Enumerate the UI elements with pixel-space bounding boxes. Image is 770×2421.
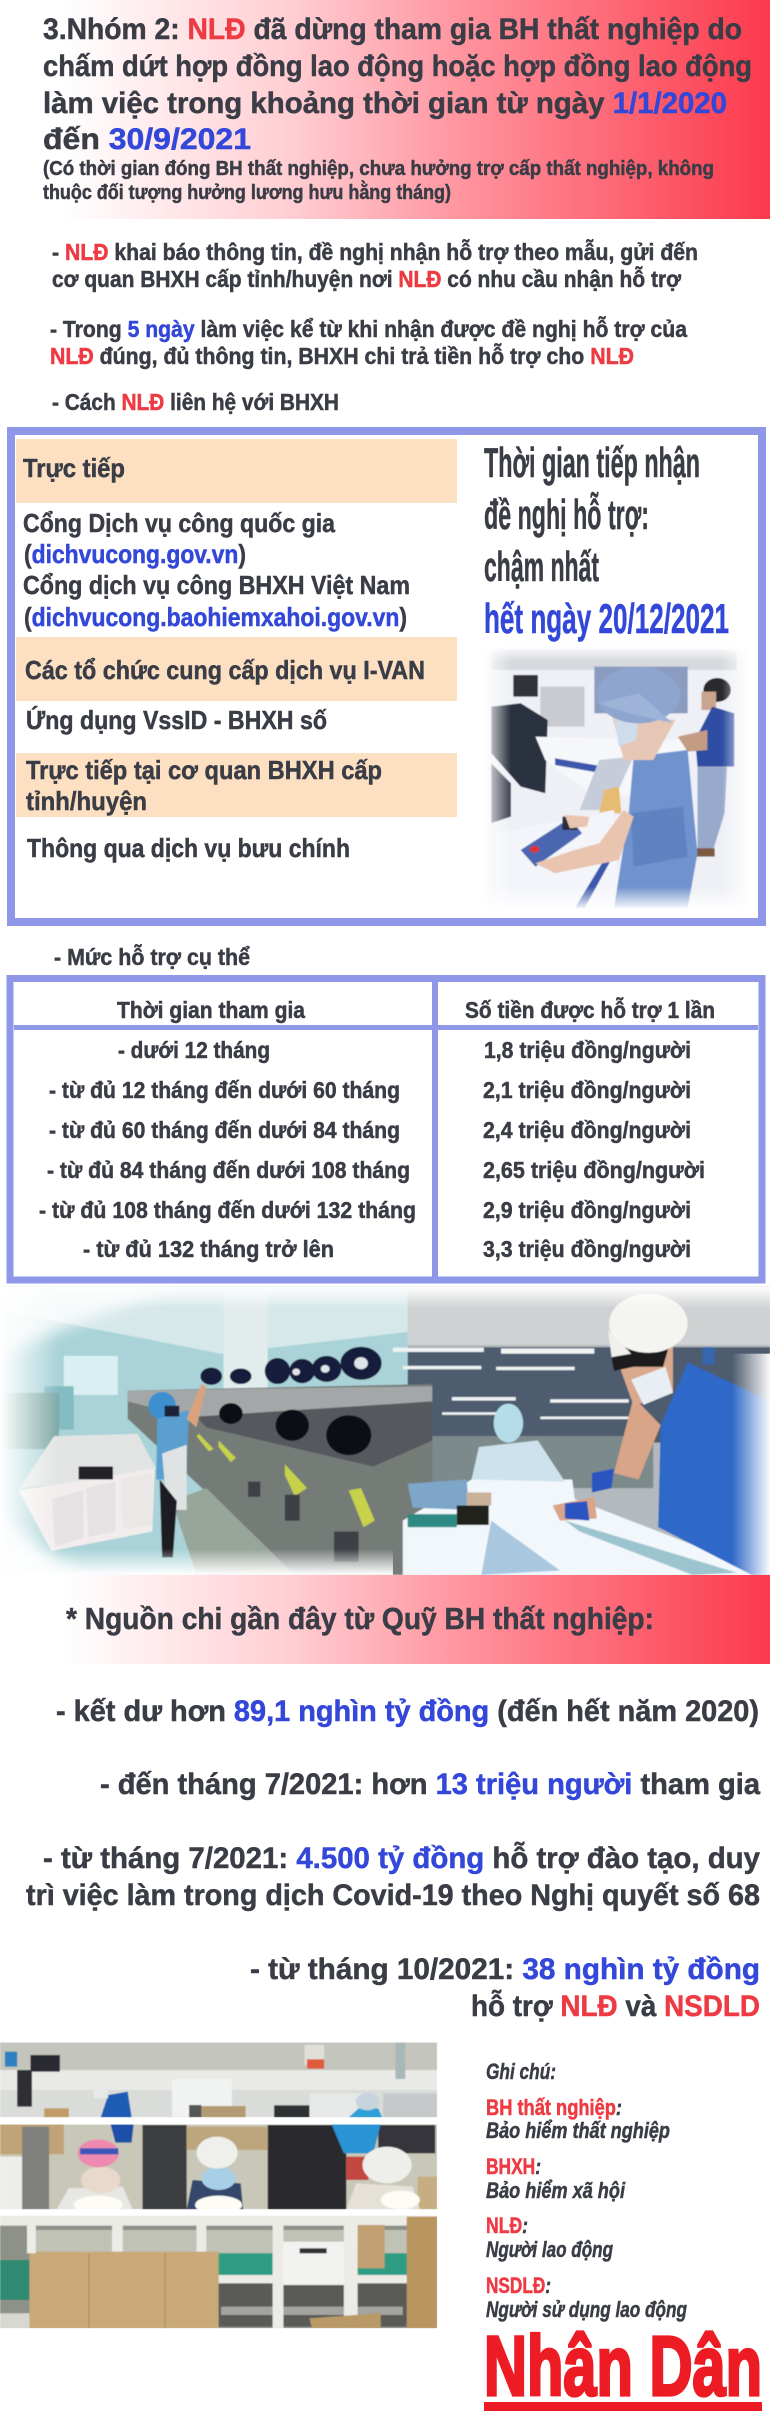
strip: packing station: [0, 2216, 437, 2328]
contact channel list: Các tổ chức cung cấp dịch vụ I-VAN: [25, 655, 425, 685]
panel: contact channels: [11, 431, 762, 922]
cart: [20, 1434, 156, 1488]
note: NLĐ: NLĐ:: [486, 2213, 528, 2238]
column: participation period: - từ đủ 108 tháng đến dưới 132 tháng: [39, 1197, 416, 1223]
column: amount per person: 3,3 triệu đồng/người: [483, 1236, 691, 1262]
panel: header banner: [0, 0, 770, 219]
peach row backgrounds: [16, 439, 457, 817]
contact channel list: Thông qua dịch vụ bưu chính: [27, 833, 350, 863]
man on the right: [703, 678, 731, 702]
centre worker: [187, 2180, 243, 2209]
photo: textile and garment factory: [0, 1286, 770, 1575]
spending list: [26, 1695, 760, 2023]
column: participation period: [39, 1037, 416, 1262]
cutting table: [403, 1479, 770, 1575]
column: amount per person: 1,8 triệu đồng/người: [484, 1037, 691, 1063]
table header: Thời gian tham gia: [117, 997, 305, 1023]
column: amount per person: 2,1 triệu đồng/người: [483, 1077, 691, 1103]
column: participation period: - từ đủ 60 tháng đến dưới 84 tháng: [49, 1117, 400, 1143]
section heading band: [0, 1575, 770, 1664]
panel: recent fund spending: [0, 1575, 770, 2023]
spending list: - kết dư hơn 89,1 nghìn tỷ đồng (đến hết năm 2020): [56, 1695, 759, 1728]
textile worker: [148, 1392, 176, 1420]
panel frame: [11, 431, 762, 922]
note: BHXH: BHXH:: [486, 2154, 541, 2179]
note heading: Ghi chú:: [486, 2059, 556, 2084]
spending list: trì việc làm trong dịch Covid-19 theo Nghị quyết số 68: [26, 1879, 760, 1912]
column: participation period: - dưới 12 tháng: [118, 1037, 270, 1063]
spending list: hỗ trợ NLĐ và NSDLD: [471, 1989, 760, 2023]
column: participation period: - từ đủ 12 tháng đến dưới 60 tháng: [49, 1077, 400, 1103]
main garment worker: [658, 1362, 770, 1575]
text block: procedure steps: NLĐ đúng, đủ thông tin, BHXH chi trả tiền hỗ trợ cho NLĐ: [50, 342, 634, 369]
text block: procedure steps: [50, 238, 698, 415]
panel: glossary notes: [486, 2059, 687, 2322]
header gradient background: [0, 0, 770, 219]
spending list: - từ tháng 10/2021: 38 nghìn tỷ đồng: [250, 1953, 760, 1986]
note: BH thất nghiệp: Bảo hiểm thất nghiệp: [486, 2118, 670, 2143]
contact channel list: Cổng dịch vụ công BHXH Việt Nam: [23, 570, 410, 600]
strip: workers with face shields: [0, 2124, 437, 2214]
subtitle note: (Có thời gian đóng BH thất nghiệp, chưa hưởng trợ cấp thất nghiệp, không: [43, 158, 714, 180]
main worker: [614, 750, 698, 908]
section heading: * Nguồn chi gần đây từ Quỹ BH thất nghiệp:: [66, 1601, 654, 1636]
contact channel list: Trực tiếp: [23, 453, 125, 483]
column: amount per person: 2,9 triệu đồng/người: [483, 1197, 691, 1223]
contact channel list: (dichvucong.baohiemxahoi.gov.vn): [24, 602, 407, 632]
spending list: - từ tháng 7/2021: 4.500 tỷ đồng hỗ trợ đào tạo, duy: [43, 1841, 760, 1875]
column: amount per person: [483, 1037, 705, 1262]
left worker: [56, 2187, 133, 2209]
note: NLĐ: [486, 2213, 613, 2262]
text block: procedure steps: - Cách NLĐ liên hệ với BHXH: [52, 389, 339, 415]
subtitle note: [43, 158, 714, 204]
faded photo corners: [0, 1294, 55, 1571]
contact channel list: Cổng Dịch vụ công quốc gia: [23, 508, 335, 538]
deadline callout: chậm nhất: [484, 543, 599, 590]
seated worker: [494, 1404, 523, 1443]
contact channel list: [23, 453, 425, 863]
table header: Số tiền được hỗ trợ 1 lần: [465, 996, 715, 1023]
subtitle note: thuộc đối tượng hưởng lương hưu hằng tháng): [43, 180, 451, 204]
note: BHXH: Bảo hiểm xã hội: [486, 2178, 626, 2203]
photo: electronics assembly line strips: [0, 2042, 437, 2328]
garment hall lights: [408, 1347, 770, 1443]
contact channel list: (dichvucong.gov.vn): [24, 539, 246, 569]
deadline callout: [484, 439, 729, 642]
heading: support levels: - Mức hỗ trợ cụ thể: [54, 943, 250, 970]
note: NSDLĐ: Người sử dụng lao động: [486, 2297, 687, 2322]
title: [43, 13, 752, 156]
note: BH thất nghiệp: [486, 2095, 670, 2143]
text block: procedure steps: - Trong 5 ngày làm việc kể từ khi nhận được đề nghị hỗ trợ của: [50, 315, 687, 342]
column: participation period: - từ đủ 132 tháng trở lên: [83, 1236, 334, 1262]
text block: procedure steps: cơ quan BHXH cấp tỉnh/huyện nơi NLĐ có nhu cầu nhận hỗ trợ: [52, 265, 682, 292]
note: NSDLĐ: NSDLĐ:: [486, 2273, 551, 2298]
winding machine: [128, 1384, 432, 1575]
yarn spools: [200, 1347, 382, 1385]
table frame and dividers: [10, 978, 762, 1281]
title: đến 30/9/2021: [43, 123, 251, 156]
contact channel list: Trực tiếp tại cơ quan BHXH cấp: [26, 755, 382, 785]
strip: factory hall: [0, 2042, 437, 2117]
soft photo edges: [481, 645, 511, 912]
factory backdrop: [0, 1286, 408, 1575]
spending list: - đến tháng 7/2021: hơn 13 triệu người tham gia: [100, 1768, 760, 1801]
column: participation period: - từ đủ 84 tháng đến dưới 108 tháng: [47, 1157, 410, 1183]
column: amount per person: 2,4 triệu đồng/người: [483, 1117, 691, 1143]
contact channel list: Ứng dụng VssID - BHXH số: [26, 705, 327, 735]
right worker: [346, 2183, 420, 2209]
table header: [117, 996, 715, 1023]
photo: worker at control panel: [481, 645, 752, 912]
contact channel list: tỉnh/huyện: [26, 786, 147, 816]
note: BH thất nghiệp: BH thất nghiệp:: [486, 2095, 622, 2120]
title: làm việc trong khoảng thời gian từ ngày 1/1/2020: [43, 87, 727, 120]
column: amount per person: 2,65 triệu đồng/người: [483, 1157, 705, 1183]
title: 3.Nhóm 2: NLĐ đã dừng tham gia BH thất nghiệp do: [43, 13, 742, 46]
text block: procedure steps: - NLĐ khai báo thông tin, đề nghị nhận hỗ trợ theo mẫu, gửi đến: [52, 238, 698, 265]
table: support amounts: [10, 978, 762, 1281]
note: BHXH: [486, 2154, 626, 2203]
note: NSDLĐ: [486, 2273, 687, 2322]
note: NLĐ: Người lao động: [486, 2237, 613, 2262]
